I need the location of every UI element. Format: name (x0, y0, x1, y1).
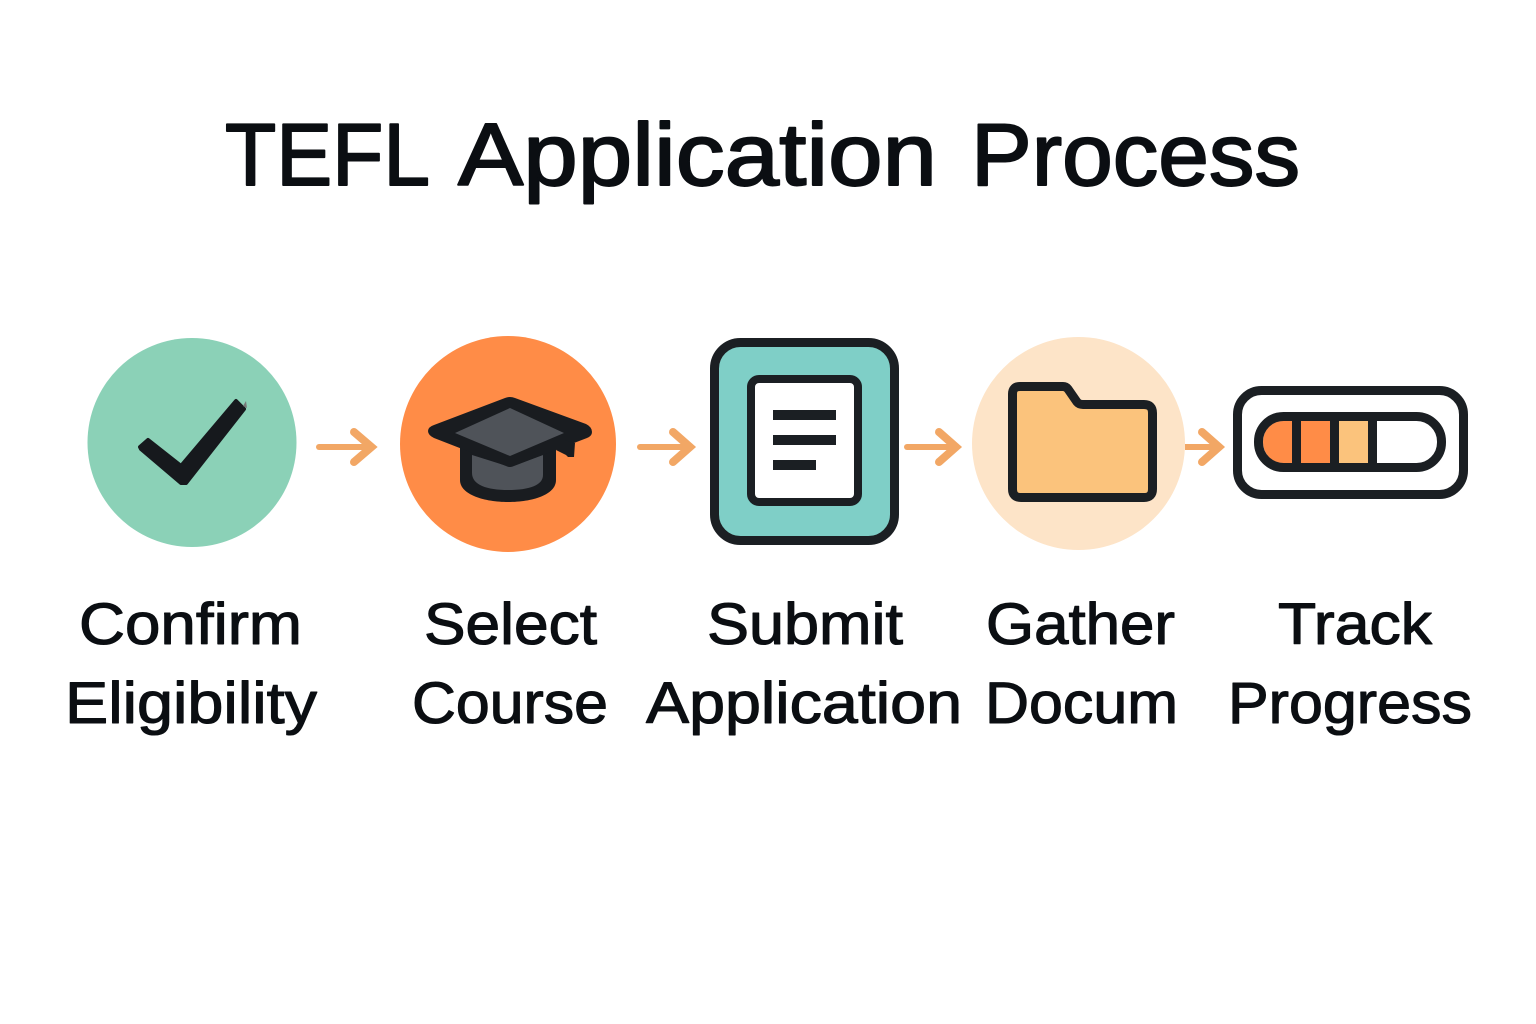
title: Process (971, 105, 1300, 204)
label: Track Progress: Progress (1228, 671, 1472, 736)
title: Application (458, 105, 937, 204)
label: Confirm Eligibility: Confirm (79, 592, 302, 657)
label: Gather Docum: Docum (985, 671, 1178, 736)
step 3: submit application (646, 342, 962, 736)
arrow 4 (1185, 432, 1219, 462)
label: Submit Application (646, 592, 962, 736)
label: Confirm Eligibility (65, 592, 317, 736)
step 5: track progress (1228, 390, 1472, 736)
arrow 2 (640, 432, 690, 462)
label: Submit Application: Application (646, 671, 962, 736)
icon: orange circle with graduation cap (400, 336, 616, 552)
title (225, 105, 1300, 204)
label: Confirm Eligibility: Eligibility (65, 671, 317, 736)
label: Track Progress (1228, 592, 1472, 736)
step 4: gather documents (972, 337, 1185, 736)
label: Select Course: Course (412, 671, 608, 736)
icon: peach circle with folder (972, 337, 1185, 550)
label: Gather Docum: Gather (986, 592, 1175, 657)
icon: progress bar (1238, 390, 1464, 494)
label: Select Course: Select (424, 592, 597, 657)
icon: teal document card (714, 342, 894, 540)
label: Gather Docum (985, 592, 1178, 736)
title: TEFL (225, 105, 430, 204)
label: Track Progress: Track (1278, 592, 1433, 657)
arrow 3 (907, 432, 956, 462)
icon: green circle with check mark (88, 338, 296, 547)
step 2: select course (400, 336, 616, 736)
label: Submit Application: Submit (707, 592, 903, 657)
label: Select Course (412, 592, 608, 736)
arrow 1 (319, 432, 372, 462)
step 1: confirm eligibility (65, 338, 317, 736)
